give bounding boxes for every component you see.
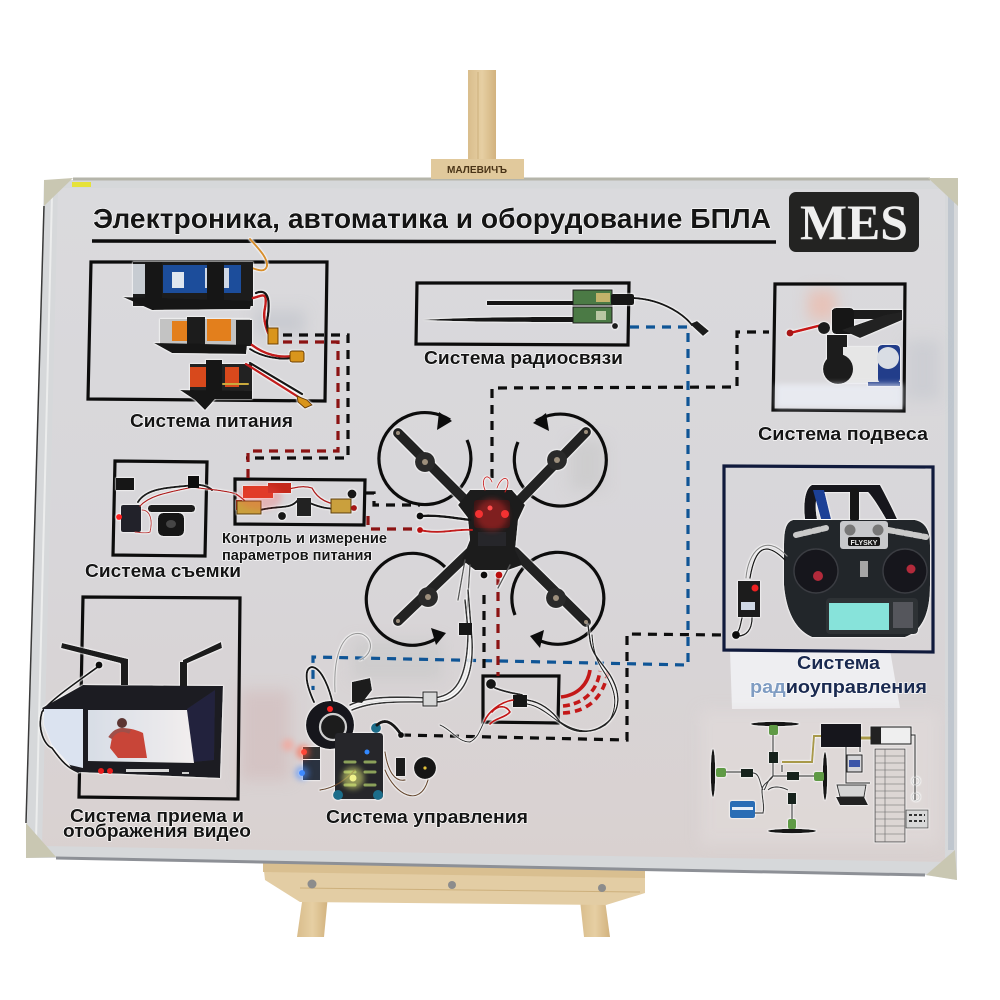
frame edges xyxy=(26,179,951,875)
video receiver label: Система приема и xyxy=(70,806,244,826)
easel: name block xyxy=(431,159,524,179)
drone LED glow xyxy=(476,499,508,531)
title: Электроника, автоматика и оборудование БПЛА xyxy=(93,203,771,234)
whiteboard surface xyxy=(42,188,945,862)
motors and ESCs xyxy=(716,725,824,829)
battery xyxy=(730,801,755,818)
power monitor label xyxy=(222,531,387,564)
drone: quadcopter frame xyxy=(396,430,588,625)
control system label: Система управления xyxy=(326,807,528,827)
sticky tag xyxy=(72,182,91,187)
pale paper patch under radio control label xyxy=(730,650,900,709)
gimbal system xyxy=(786,308,902,386)
power monitor label: параметров питания xyxy=(222,548,372,564)
radio link label: Система радиосвязи xyxy=(424,348,623,368)
panel frames xyxy=(79,262,933,799)
gimbal label: Система подвеса xyxy=(758,424,929,444)
radio receiver module on airframe xyxy=(440,625,618,742)
rotation arrows xyxy=(366,412,606,648)
logo: MES: MES xyxy=(800,194,908,250)
video receiver label: отображения видео xyxy=(63,821,251,841)
easel: legs and tray xyxy=(263,862,645,937)
radio control: transmitter and receiver: FLYSKY xyxy=(851,540,878,547)
frame corners xyxy=(26,178,958,880)
control system: GPS, flight controller, wires xyxy=(299,590,472,800)
video receiver: monitor xyxy=(40,642,223,778)
radio control label: радиоуправления xyxy=(750,677,927,697)
radio link: antennas and modules xyxy=(423,290,709,336)
connection lines: dashed xyxy=(246,327,769,740)
wiring diagram xyxy=(711,722,928,842)
board shadows and reflections xyxy=(240,290,940,780)
control system LED glow xyxy=(282,739,364,789)
gps module xyxy=(847,755,862,772)
power system label: Система питания xyxy=(130,411,293,431)
radio control: transmitter and receiver xyxy=(732,485,930,639)
radio control label: Система xyxy=(797,653,881,673)
power monitor board xyxy=(236,483,357,520)
radio waves xyxy=(561,670,608,713)
video receiver label xyxy=(63,806,251,841)
power system: batteries xyxy=(123,239,312,410)
title underline xyxy=(92,241,776,242)
easel: name block: МАЛЕВИЧЪ xyxy=(447,165,507,176)
whiteboard frame xyxy=(26,178,958,880)
easel: top mast xyxy=(468,70,496,170)
parts table xyxy=(875,749,905,842)
wires xyxy=(726,735,915,819)
gimbal xyxy=(836,785,868,805)
gimbal panel highlight xyxy=(776,384,903,408)
receiver xyxy=(871,727,911,744)
power monitor glow xyxy=(238,484,282,510)
soft gloss on lower right xyxy=(700,710,940,845)
radio control label xyxy=(750,653,927,697)
camera label: Система съемки xyxy=(85,561,241,581)
camera system xyxy=(116,476,236,536)
props xyxy=(711,722,827,833)
power monitor label: Контроль и измерение xyxy=(222,531,387,547)
camera module xyxy=(906,810,928,828)
flight controller xyxy=(821,724,861,747)
